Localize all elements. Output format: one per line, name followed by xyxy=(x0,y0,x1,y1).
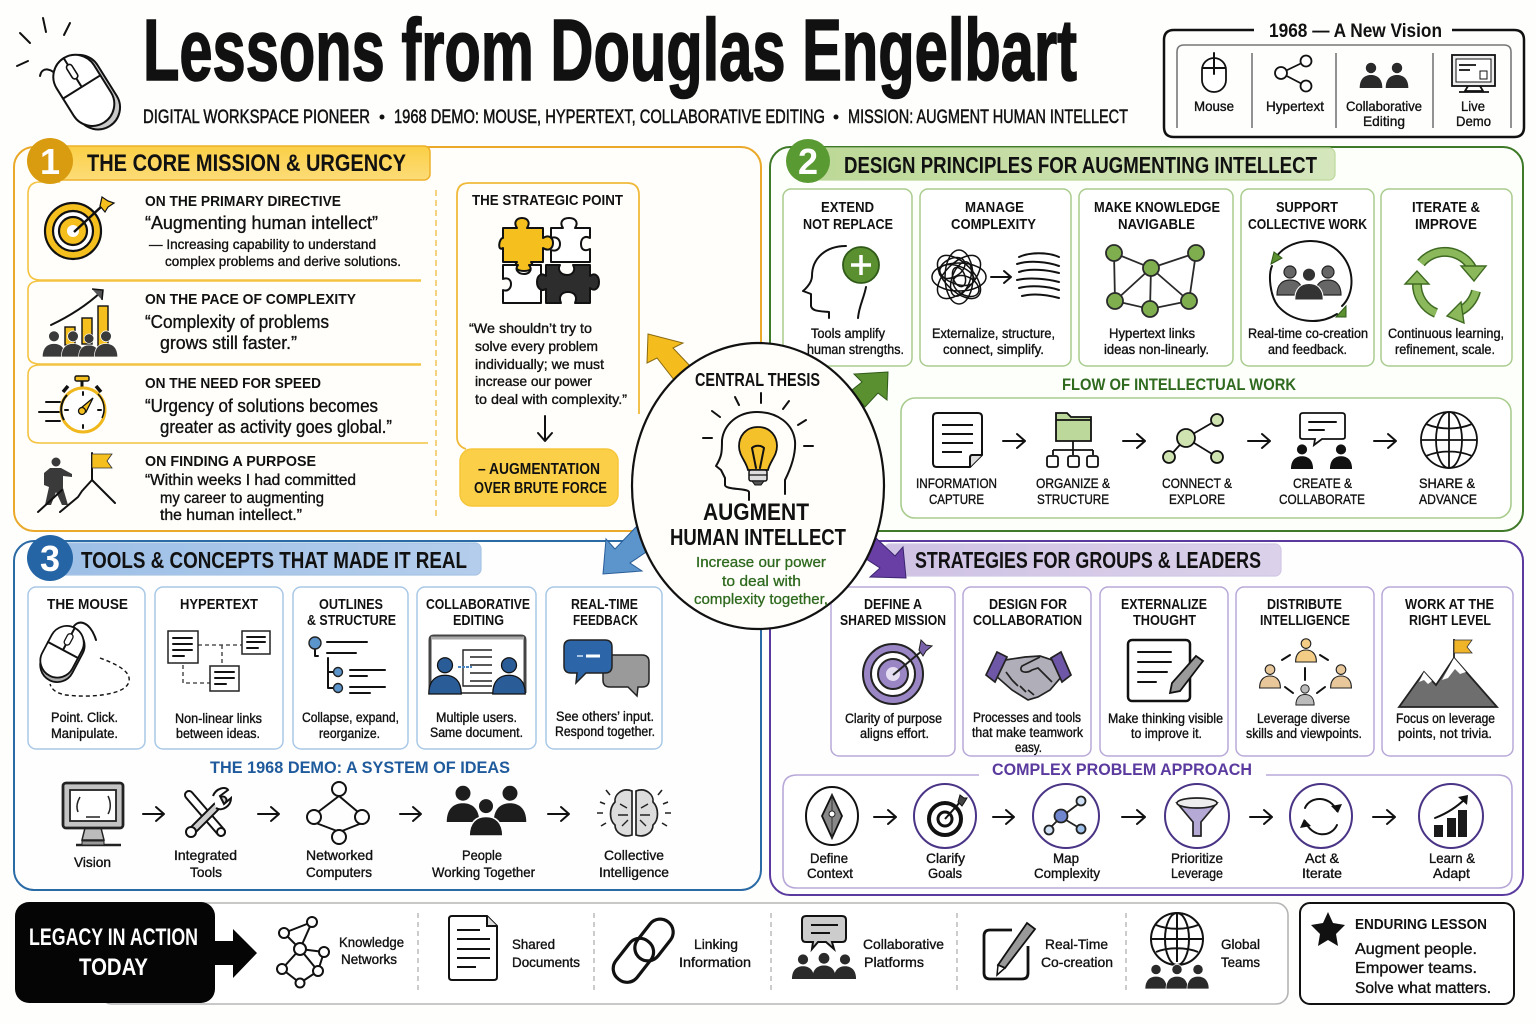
arrow xyxy=(258,807,279,821)
label: real-time co-creation: Real-Time xyxy=(1045,936,1108,952)
label: organize and structure xyxy=(1036,475,1111,507)
card: outlines and structure: & STRUCTURE xyxy=(307,612,396,629)
label: knowledge networks: Networks xyxy=(341,951,397,967)
card: collaborative editing: EDITING xyxy=(453,612,504,629)
central thesis circle xyxy=(632,343,884,629)
callout: enduring lesson: Empower teams. xyxy=(1355,960,1477,977)
arrow xyxy=(548,807,569,821)
card: iterate and improve: IMPROVE xyxy=(1415,216,1477,233)
label: clarify goals xyxy=(926,850,965,881)
icon: globe xyxy=(1421,412,1477,468)
heading: 1968 a new vision: 1968 — A New Vision xyxy=(1269,21,1442,42)
icon: compass xyxy=(806,787,858,845)
card: extend not replace: human strengths. xyxy=(807,342,904,357)
strategic quote: to deal with complexity.” xyxy=(475,391,627,407)
arrow xyxy=(1373,810,1395,824)
thesis statement: HUMAN INTELLECT xyxy=(670,524,846,550)
icon: distributed team xyxy=(1260,639,1351,705)
card: the strategic point xyxy=(457,183,639,506)
label: learn and adapt xyxy=(1429,850,1476,881)
card: work at the right level: WORK AT THE xyxy=(1405,596,1494,613)
label: global teams: Global xyxy=(1221,936,1260,952)
quote: need for speed: greater as activity goes global.” xyxy=(160,417,392,437)
card: design for collaboration: COLLABORATION xyxy=(973,612,1082,629)
callout: augmentation over brute force: OVER BRUTE FORCE xyxy=(474,480,607,497)
label: prioritize leverage: Leverage xyxy=(1171,865,1223,881)
icon: tangle to ordered lines xyxy=(930,248,1059,306)
callout: enduring lesson: Solve what matters. xyxy=(1355,980,1491,997)
card: support collective work xyxy=(1241,189,1374,366)
section banner 2: 2 xyxy=(798,141,818,182)
card: collaborative editing xyxy=(417,587,536,749)
card: externalize thought: to improve it. xyxy=(1131,726,1202,741)
label: organize and structure: ORGANIZE & xyxy=(1036,475,1111,491)
arrow xyxy=(1123,434,1145,448)
icon: target xyxy=(45,197,114,259)
label: integrated tools xyxy=(174,847,237,880)
label: connect and explore: CONNECT & xyxy=(1162,475,1233,491)
icon: shared documents xyxy=(449,916,497,980)
card: the mouse xyxy=(28,587,145,749)
label: connect and explore: EXPLORE xyxy=(1169,491,1225,507)
icon: globe and team xyxy=(1145,913,1209,989)
card: the mouse: Manipulate. xyxy=(51,726,118,741)
card: externalize thought xyxy=(1100,587,1228,756)
section banner 4: STRATEGIES FOR GROUPS & LEADERS xyxy=(915,547,1261,573)
card: the mouse: Point. Click. xyxy=(51,710,118,725)
card: hypertext xyxy=(155,587,283,749)
icon: brain with rays xyxy=(597,790,671,836)
section banner 1 xyxy=(27,138,430,184)
card: design for collaboration xyxy=(963,587,1091,756)
icon: two collaborators xyxy=(1360,63,1408,88)
arrow xyxy=(1122,810,1145,824)
quote: pace of complexity xyxy=(145,291,356,353)
card: make knowledge navigable: ideas non-linearly. xyxy=(1104,342,1209,357)
label: share and advance: SHARE & xyxy=(1419,475,1476,491)
quote: finding a purpose: ON FINDING A PURPOSE xyxy=(145,453,316,470)
icon: people together xyxy=(447,786,526,836)
label: linking information: Information xyxy=(679,954,751,970)
label: collaborative platforms xyxy=(863,936,944,970)
heading: flow of intellectual work: FLOW OF INTELLECTUAL WORK xyxy=(1062,375,1297,394)
arrow xyxy=(1248,434,1270,448)
card: make knowledge navigable xyxy=(1079,189,1233,366)
label: collective intelligence xyxy=(599,847,669,880)
arrow xyxy=(400,807,421,821)
card: distribute intelligence xyxy=(1236,587,1374,756)
card: design for collaboration: that make teamwork xyxy=(972,725,1083,740)
icon: map complexity xyxy=(1033,784,1099,848)
icon: networked computers xyxy=(307,782,369,844)
card: outlines and structure: OUTLINES xyxy=(319,596,383,613)
card: the mouse: THE MOUSE xyxy=(47,596,128,613)
section banner 2: DESIGN PRINCIPLES FOR AUGMENTING INTELLECT xyxy=(844,152,1317,178)
arrow xyxy=(1374,434,1396,448)
card: make knowledge navigable: Hypertext links xyxy=(1109,326,1195,341)
card: collaborative editing: COLLABORATIVE xyxy=(426,596,530,613)
card: real-time feedback: FEEDBACK xyxy=(573,612,638,629)
label: clarify goals: Clarify xyxy=(926,850,965,866)
callout: enduring lesson xyxy=(1300,903,1514,1004)
card: hypertext: HYPERTEXT xyxy=(180,596,258,613)
card: hypertext: between ideas. xyxy=(176,726,260,741)
arrow xyxy=(874,810,896,824)
label: collective intelligence: Collective xyxy=(604,847,664,863)
quote: pace of complexity: ON THE PACE OF COMPLEXITY xyxy=(145,291,356,308)
arrow xyxy=(143,807,164,821)
icon: create and collaborate xyxy=(1291,413,1352,469)
label: collaborative platforms: Platforms xyxy=(864,954,924,970)
label: live demo xyxy=(1456,98,1491,129)
label: create and collaborate: CREATE & xyxy=(1293,475,1353,491)
card: outlines and structure: reorganize. xyxy=(319,726,380,741)
card: distribute intelligence: DISTRIBUTE xyxy=(1267,596,1342,613)
panel 3: tools and concepts xyxy=(14,535,761,890)
card: extend not replace: Tools amplify xyxy=(811,326,885,341)
thesis supporting text xyxy=(694,554,828,608)
label: global teams: Teams xyxy=(1221,954,1260,970)
label: prioritize leverage: Prioritize xyxy=(1171,850,1223,866)
label: live demo: Live xyxy=(1461,98,1485,114)
label: mouse: Mouse xyxy=(1194,98,1234,114)
label: information capture xyxy=(916,475,997,507)
card: distribute intelligence: Leverage diverse xyxy=(1257,711,1350,726)
icon: connect nodes xyxy=(1163,414,1223,463)
card: extend not replace: NOT REPLACE xyxy=(803,216,893,233)
card: distribute intelligence: skills and viewpoints. xyxy=(1246,726,1362,741)
panel 4: strategies for groups and leaders xyxy=(770,541,1523,895)
label: define context: Define xyxy=(810,850,848,866)
quote: primary directive: — Increasing capability to understand xyxy=(149,236,376,252)
panel 2: design principles xyxy=(770,139,1523,531)
label: learn and adapt: Adapt xyxy=(1433,865,1470,881)
card: iterate and improve xyxy=(1381,189,1512,366)
card: outlines and structure xyxy=(293,587,408,749)
icon: mouse with dashed path xyxy=(32,620,129,696)
label: share and advance xyxy=(1419,475,1477,507)
card: make knowledge navigable: MAKE KNOWLEDGE xyxy=(1094,199,1220,216)
card: work at the right level: Focus on leverage xyxy=(1396,711,1495,726)
quote: need for speed: “Urgency of solutions becomes xyxy=(145,396,378,416)
quote: finding a purpose: my career to augmenting xyxy=(160,490,324,507)
label: collaborative platforms: Collaborative xyxy=(863,936,944,952)
card: support collective work: COLLECTIVE WORK xyxy=(1248,216,1367,233)
quote: primary directive: complex problems and derive solutions. xyxy=(165,253,401,269)
icon: outline tree xyxy=(309,637,385,693)
arrow xyxy=(1250,810,1272,824)
section banner 3: TOOLS & CONCEPTS THAT MADE IT REAL xyxy=(81,547,467,573)
icon: hypertext network xyxy=(1106,245,1204,317)
callout: enduring lesson: ENDURING LESSON xyxy=(1355,916,1487,933)
label: create and collaborate: COLLABORATE xyxy=(1279,491,1365,507)
card: define a shared mission xyxy=(831,587,955,756)
label: hypertext: Hypertext xyxy=(1266,98,1324,114)
legacy in action bar xyxy=(15,902,1288,1004)
thesis supporting text: complexity together, xyxy=(694,591,828,608)
card: work at the right level: RIGHT LEVEL xyxy=(1409,612,1491,629)
card: extend not replace xyxy=(783,189,912,366)
label: real-time co-creation: Co-creation xyxy=(1041,954,1113,970)
flow box: complex problem approach xyxy=(783,760,1512,888)
thesis supporting text: to deal with xyxy=(722,573,801,590)
icon: climber and flag on mountain xyxy=(38,453,115,512)
label: connect and explore xyxy=(1162,475,1233,507)
label: act and iterate: Iterate xyxy=(1302,865,1342,881)
section banner 1: THE CORE MISSION & URGENCY xyxy=(87,150,406,177)
legacy heading block with arrow: TODAY xyxy=(79,954,148,981)
label: map complexity: Complexity xyxy=(1034,865,1100,881)
icon: cycle arrows xyxy=(1405,252,1486,323)
label: networked computers xyxy=(306,847,373,880)
thesis supporting text: Increase our power xyxy=(696,554,826,571)
icon: real-time co-creation xyxy=(984,923,1035,979)
card: make knowledge navigable: NAVIGABLE xyxy=(1118,216,1195,233)
icon: vision monitor xyxy=(63,783,123,845)
label: information capture: INFORMATION xyxy=(916,475,997,491)
icon: live demo screen xyxy=(1452,55,1495,92)
label: organize and structure: STRUCTURE xyxy=(1037,491,1109,507)
icon: computer mouse with click rays xyxy=(17,18,128,139)
card: iterate and improve: refinement, scale. xyxy=(1395,342,1495,357)
icon: head with light bulb xyxy=(703,393,813,500)
quote: need for speed: ON THE NEED FOR SPEED xyxy=(145,375,321,392)
card: define a shared mission: DEFINE A xyxy=(864,596,922,613)
icon: knowledge networks xyxy=(277,917,329,988)
section banner 1: 1 xyxy=(40,141,60,182)
icon: crossed tools xyxy=(186,788,231,837)
card: iterate and improve: Continuous learning, xyxy=(1388,326,1504,341)
icon: purple target xyxy=(863,640,932,704)
label: share and advance: ADVANCE xyxy=(1419,491,1477,507)
icon: folder and hierarchy xyxy=(1047,413,1098,467)
label: learn and adapt: Learn & xyxy=(1429,850,1476,866)
label: act and iterate: Act & xyxy=(1305,850,1340,866)
quote: finding a purpose: “Within weeks I had committed xyxy=(145,472,356,489)
legacy heading block with arrow xyxy=(15,902,257,1003)
label: people working together xyxy=(432,847,535,880)
label: act and iterate xyxy=(1302,850,1342,881)
label: integrated tools: Tools xyxy=(190,864,222,880)
label: knowledge networks xyxy=(339,934,404,967)
label: people working together: Working Together xyxy=(432,864,535,880)
card: work at the right level xyxy=(1382,587,1513,756)
icon: handshake xyxy=(986,652,1071,700)
icon: shared screen with users xyxy=(429,636,525,694)
heading: complex problem approach: COMPLEX PROBLEM APPROACH xyxy=(992,760,1252,779)
card: collaborative editing: Multiple users. xyxy=(436,710,517,725)
icon: mouse xyxy=(1202,53,1226,92)
quote: primary directive: “Augmenting human intellect” xyxy=(145,213,378,233)
card: iterate and improve: ITERATE & xyxy=(1412,199,1480,216)
label: define context: Context xyxy=(807,865,853,881)
thesis statement xyxy=(670,499,846,550)
card: support collective work: and feedback. xyxy=(1268,342,1347,357)
callout: augmentation over brute force: – AUGMENTATION xyxy=(478,461,600,478)
label: define context xyxy=(807,850,853,881)
arrow xyxy=(1003,434,1025,448)
card: externalize thought: THOUGHT xyxy=(1133,612,1196,629)
icon: funnel xyxy=(1165,784,1229,848)
label: live demo: Demo xyxy=(1456,113,1491,129)
card: manage complexity xyxy=(920,189,1071,366)
label: linking information xyxy=(679,936,751,970)
label: vision: Vision xyxy=(74,854,111,870)
icon: mountain with flag xyxy=(1399,639,1497,707)
arrow: to panel 1 xyxy=(647,334,691,381)
strategic quote xyxy=(469,320,627,407)
label: shared documents xyxy=(512,936,580,970)
card: hypertext: Non-linear links xyxy=(175,711,262,726)
label: collaborative editing: Editing xyxy=(1363,113,1405,129)
quote: pace of complexity: grows still faster.” xyxy=(160,333,297,353)
strategic quote: “We shouldn’t try to xyxy=(469,320,592,336)
card: work at the right level: points, not trivia. xyxy=(1398,726,1492,741)
subtitle: 1968 DEMO: MOUSE, HYPERTEXT, COLLABORATIVE EDITING xyxy=(394,107,825,128)
label: real-time co-creation xyxy=(1041,936,1113,970)
panel: 1968 a new vision xyxy=(1164,21,1524,137)
label: collaborative editing: Collaborative xyxy=(1346,98,1422,114)
icon: act and iterate cycle xyxy=(1290,784,1352,848)
label: global teams xyxy=(1221,936,1260,970)
icon: head with plus xyxy=(803,246,879,318)
label: knowledge networks: Knowledge xyxy=(339,934,404,950)
icon: speech bubbles xyxy=(564,640,649,696)
icon: chain link xyxy=(608,914,678,988)
card: define a shared mission: SHARED MISSION xyxy=(840,612,946,629)
panel 1: the core mission and urgency xyxy=(14,138,761,531)
icon: document xyxy=(933,413,982,467)
label: information capture: CAPTURE xyxy=(929,491,984,507)
label: networked computers: Computers xyxy=(306,864,372,880)
row frames xyxy=(28,182,428,443)
label: map complexity xyxy=(1034,850,1100,881)
icon: hypertext xyxy=(1275,56,1312,92)
arrow: to panel 2 xyxy=(852,372,888,407)
subtitle: MISSION: AUGMENT HUMAN INTELLECT xyxy=(848,107,1128,128)
card: distribute intelligence: INTELLIGENCE xyxy=(1260,612,1350,629)
strategic quote: individually; we must xyxy=(475,356,604,372)
icon: notepad and pencil xyxy=(1128,640,1203,701)
subtitle xyxy=(143,107,1128,128)
quote: need for speed xyxy=(145,375,392,437)
callout: enduring lesson: Augment people. xyxy=(1355,941,1477,958)
strategic quote: solve every problem xyxy=(475,338,598,354)
icon: clarify target xyxy=(914,784,976,848)
card: define a shared mission: Clarity of purpose xyxy=(845,711,942,726)
card: manage complexity: MANAGE xyxy=(965,199,1024,216)
card: support collective work: Real-time co-creation xyxy=(1248,326,1368,341)
label: map complexity: Map xyxy=(1053,850,1079,866)
quote: primary directive xyxy=(145,193,401,269)
label: shared documents: Shared xyxy=(512,936,555,952)
arrow: to panel 3 xyxy=(603,527,652,574)
card: manage complexity: connect, simplify. xyxy=(943,342,1044,357)
card: support collective work: SUPPORT xyxy=(1276,199,1338,216)
label: collaborative editing xyxy=(1346,98,1422,129)
title: Lessons from Douglas Engelbart xyxy=(143,2,1077,99)
card: collaborative editing: Same document. xyxy=(430,725,523,740)
card: define a shared mission: aligns effort. xyxy=(860,726,929,741)
card: manage complexity: Externalize, structure, xyxy=(932,326,1055,341)
icon: puzzle pieces xyxy=(499,218,599,303)
label: shared documents: Documents xyxy=(512,954,580,970)
card: real-time feedback xyxy=(546,587,662,749)
card: design for collaboration: Processes and tools xyxy=(973,710,1081,725)
card: real-time feedback: Respond together. xyxy=(555,724,655,739)
label: create and collaborate xyxy=(1279,475,1365,507)
card: real-time feedback: REAL-TIME xyxy=(571,596,638,613)
icon: stopwatch xyxy=(39,376,105,432)
strategic quote: increase our power xyxy=(475,373,592,389)
card: manage complexity: COMPLEXITY xyxy=(951,216,1036,233)
card: externalize thought: EXTERNALIZE xyxy=(1121,596,1207,613)
label: clarify goals: Goals xyxy=(928,865,962,881)
heading: central thesis: CENTRAL THESIS xyxy=(695,370,820,390)
label: people working together: People xyxy=(462,847,502,863)
arrow: to panel 4 xyxy=(860,538,906,578)
icon: linked documents xyxy=(168,631,270,691)
card: outlines and structure: Collapse, expand, xyxy=(302,710,399,725)
card: externalize thought: Make thinking visible xyxy=(1108,711,1223,726)
label: integrated tools: Integrated xyxy=(174,847,237,863)
quote: finding a purpose xyxy=(145,453,356,524)
section banner 4 xyxy=(884,544,1281,576)
card: extend not replace: EXTEND xyxy=(821,199,874,216)
label: collective intelligence: Intelligence xyxy=(599,864,669,880)
arrow: down xyxy=(538,416,552,441)
section banner 3: 3 xyxy=(40,538,60,579)
icon: team in cycle xyxy=(1270,241,1352,321)
card: the strategic point: THE STRATEGIC POINT xyxy=(472,192,623,209)
heading: the 1968 demo: THE 1968 DEMO: A SYSTEM OF IDEAS xyxy=(210,758,510,777)
arrow xyxy=(993,810,1014,824)
card: design for collaboration: easy. xyxy=(1015,740,1042,755)
label: prioritize leverage xyxy=(1171,850,1223,881)
subtitle: DIGITAL WORKSPACE PIONEER xyxy=(143,107,370,128)
callout: augmentation over brute force xyxy=(460,449,618,506)
quote: finding a purpose: the human intellect.” xyxy=(160,507,302,524)
icon: collaborative platforms xyxy=(792,916,856,979)
quote: pace of complexity: “Complexity of problems xyxy=(145,312,329,332)
label: networked computers: Networked xyxy=(306,847,373,863)
quote: primary directive: ON THE PRIMARY DIRECTIVE xyxy=(145,193,341,210)
section banner 2 xyxy=(786,139,1335,183)
card: design for collaboration: DESIGN FOR xyxy=(989,596,1067,613)
flow: intellectual work xyxy=(901,398,1511,518)
icon: rising chart with people xyxy=(42,289,118,357)
card: real-time feedback: See others’ input. xyxy=(556,709,654,724)
flow: system of ideas xyxy=(63,782,671,880)
icon: learn and adapt chart xyxy=(1419,784,1483,848)
legacy heading block with arrow: LEGACY IN ACTION xyxy=(29,924,198,951)
label: linking information: Linking xyxy=(694,936,738,952)
section banner 3 xyxy=(27,535,481,581)
icon: star xyxy=(1311,912,1345,946)
thesis statement: AUGMENT xyxy=(703,499,809,526)
